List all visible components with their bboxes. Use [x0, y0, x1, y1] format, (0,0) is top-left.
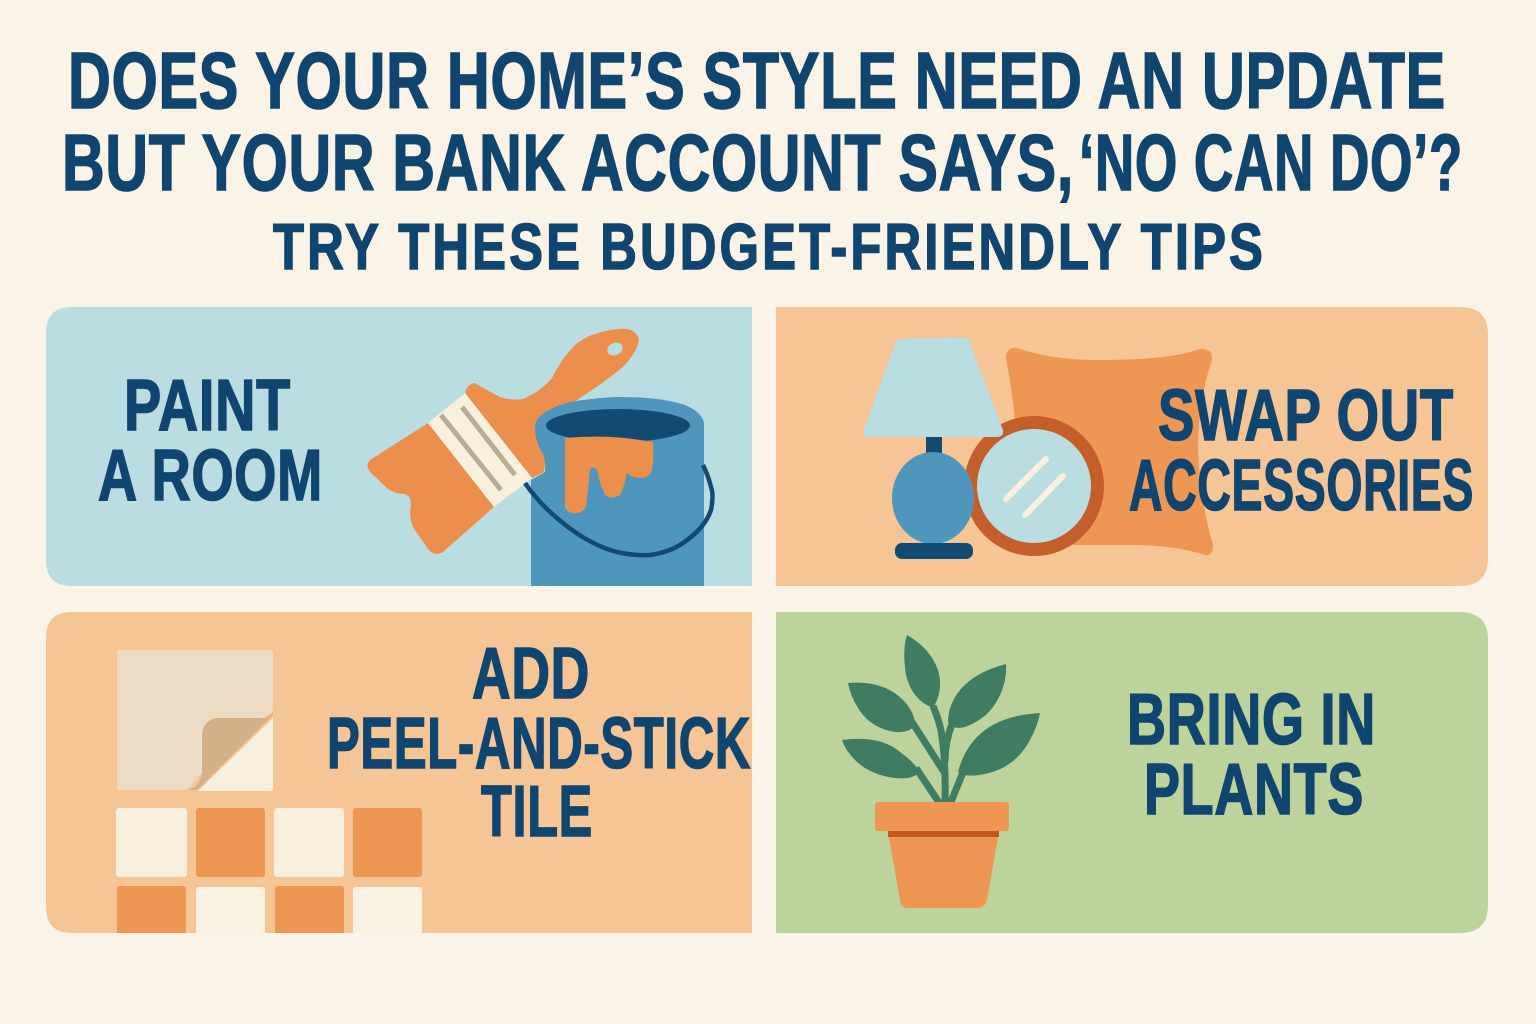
icon: peeling sticker — [117, 650, 273, 791]
plant leaves — [842, 635, 1040, 778]
title: BUT YOUR BANK ACCOUNT SAYS, — [62, 118, 1074, 207]
title — [62, 36, 1463, 207]
label: PLANTS — [1144, 750, 1364, 830]
label — [327, 634, 751, 852]
icon: potted plant — [842, 635, 1040, 908]
plant stems — [912, 706, 964, 804]
label: A ROOM — [98, 436, 323, 516]
label — [1129, 376, 1474, 526]
label — [98, 366, 323, 516]
icon: mirror — [970, 422, 1098, 550]
label: BRING IN — [1127, 680, 1376, 760]
label — [1127, 680, 1376, 830]
panel: bring in plants — [776, 612, 1488, 933]
panel: paint a room — [46, 307, 752, 586]
subtitle: TRY THESE BUDGET-FRIENDLY TIPS — [273, 210, 1266, 283]
icon: pillow — [1006, 348, 1213, 555]
label: PAINT — [124, 366, 291, 446]
label: TILE — [481, 772, 593, 852]
icon: paint brush — [368, 329, 639, 554]
panel: swap out accessories — [776, 307, 1488, 586]
icon: paint bucket — [525, 397, 712, 586]
panel: peel and stick tile — [46, 612, 752, 933]
icon: lamp — [863, 338, 1003, 559]
icon: tiles — [116, 808, 422, 933]
label: PEEL-AND-STICK — [327, 704, 751, 784]
label: ADD — [472, 634, 590, 714]
pot — [875, 802, 1009, 908]
